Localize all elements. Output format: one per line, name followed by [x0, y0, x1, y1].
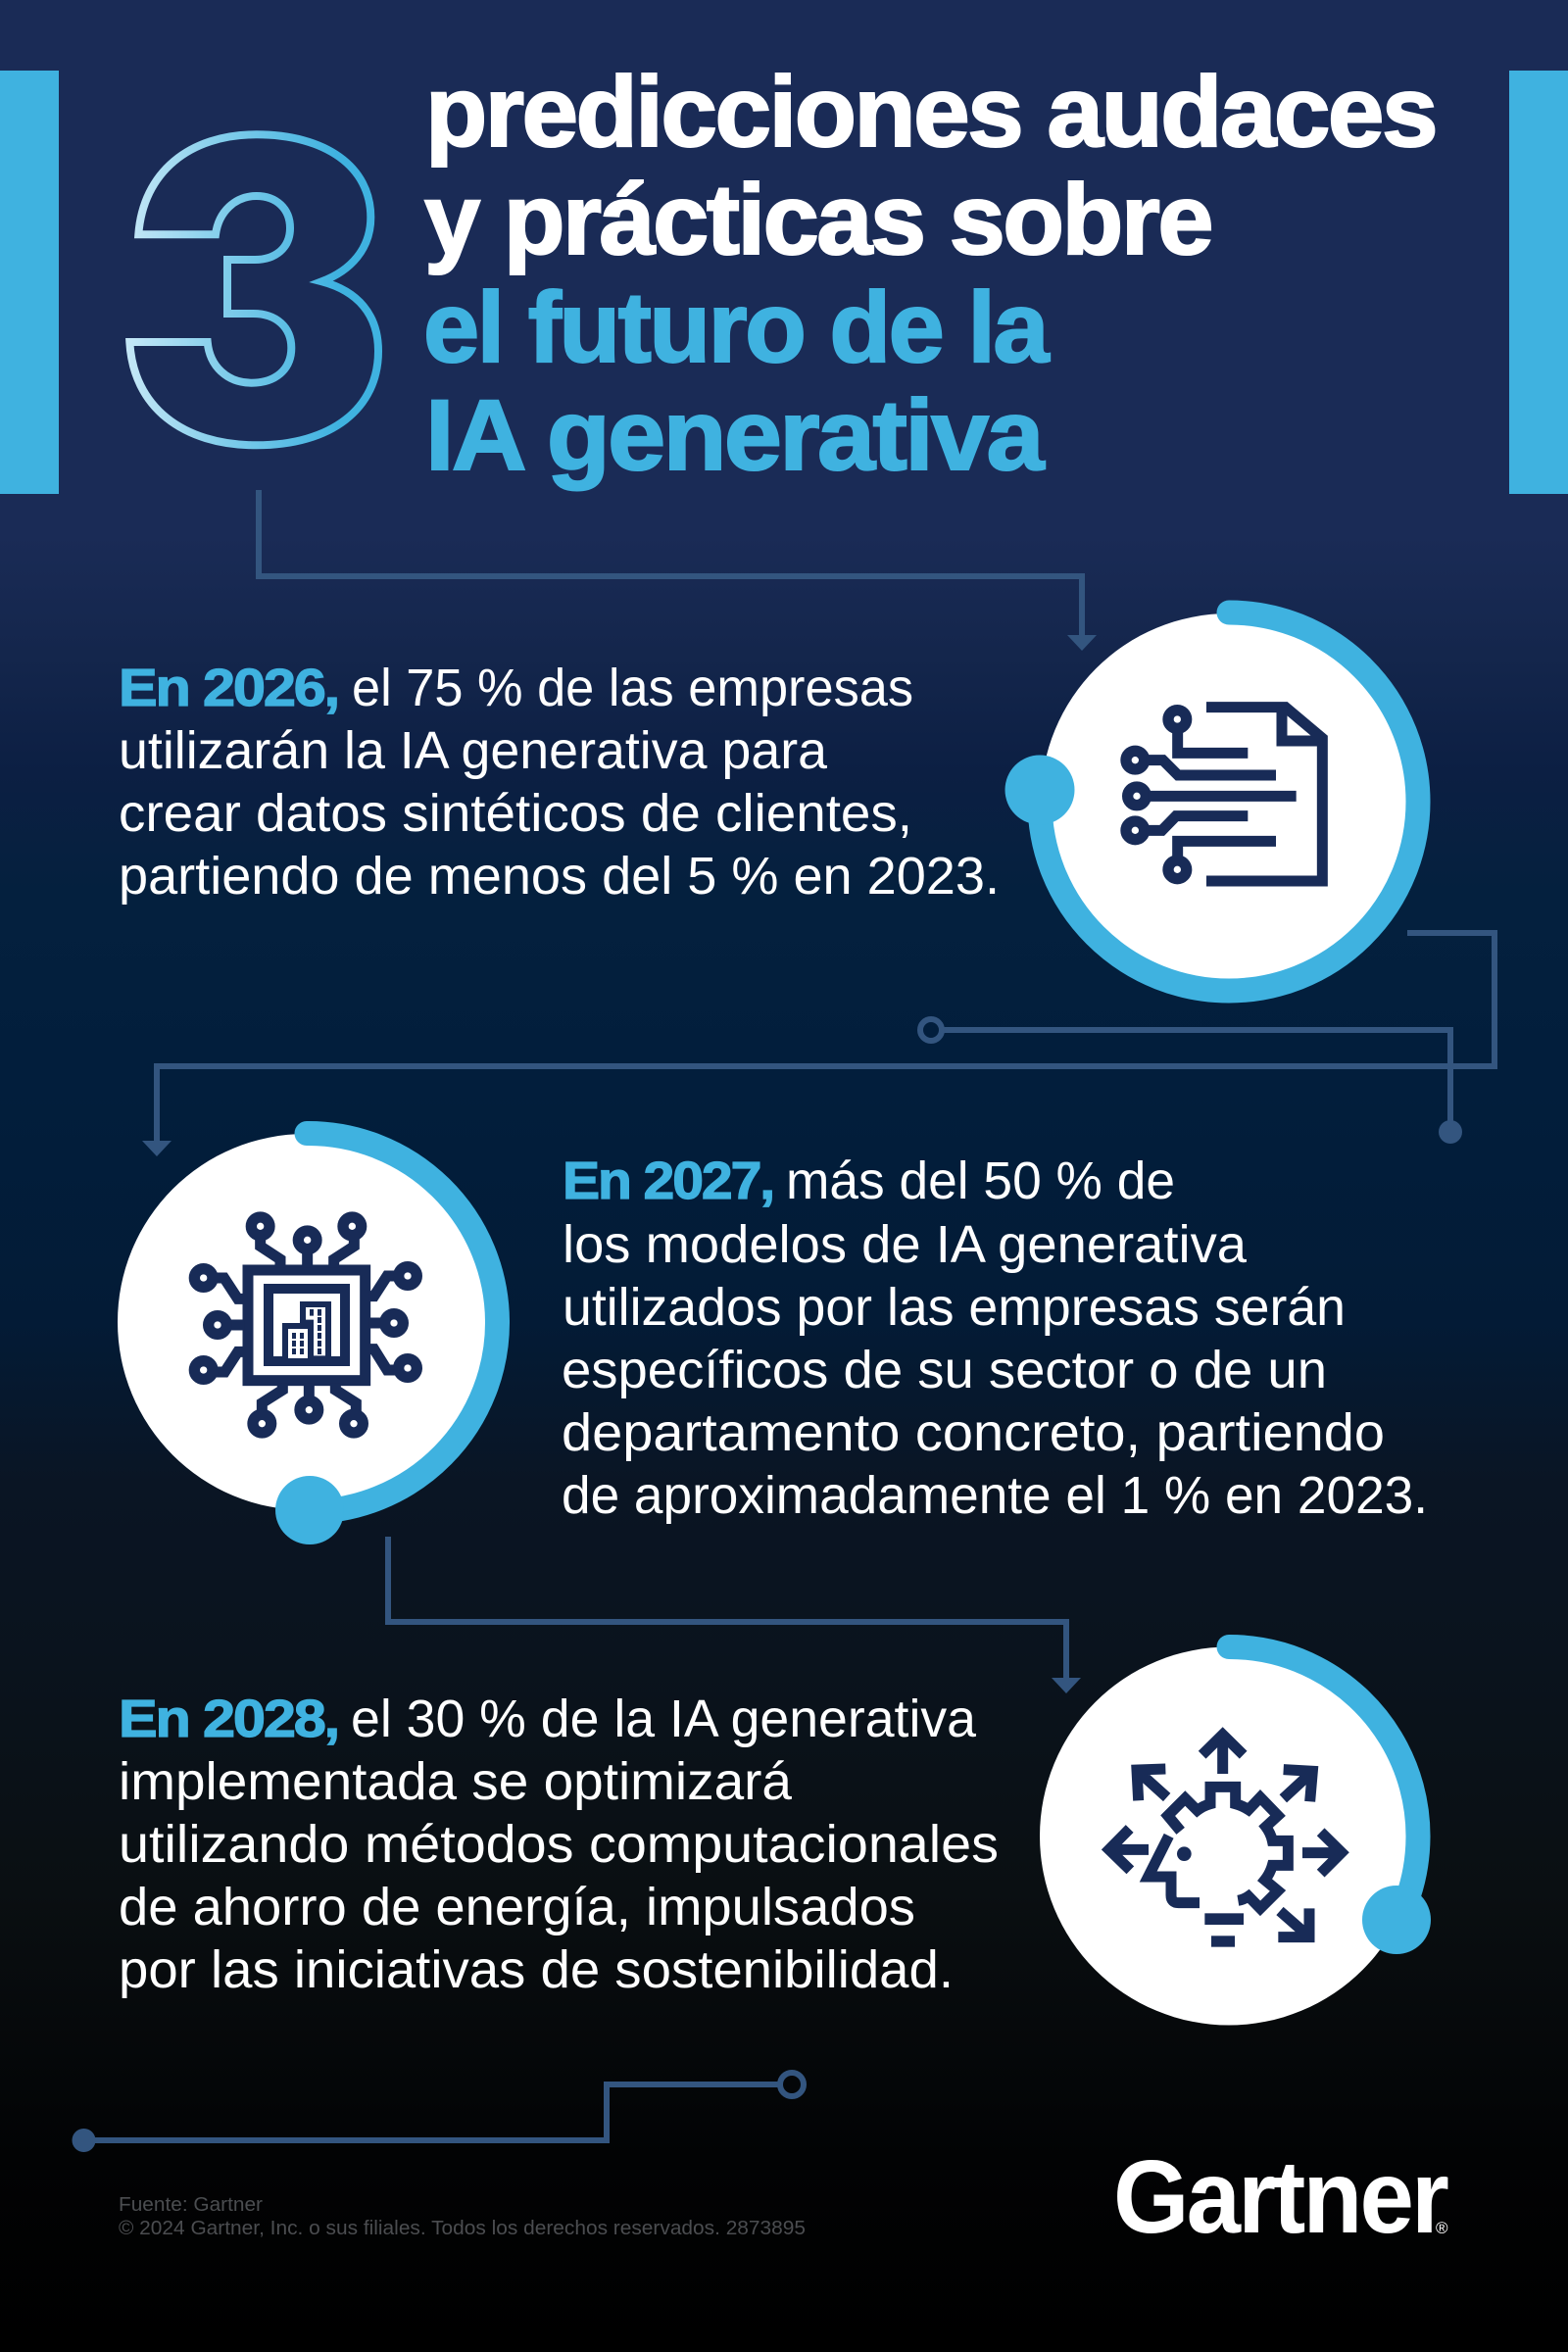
decorative circuit with nodes: [920, 1019, 1462, 1144]
text block: 2028 prediction: por las iniciativas de sostenibilidad.: [119, 1940, 954, 1999]
source and copyright: Fuente: Gartner: [119, 2194, 263, 2216]
text block: 2027 prediction: los modelos de IA generativa: [563, 1215, 1248, 1274]
title: IA generativa: [425, 379, 1046, 491]
text block: 2026 prediction: el 75 % de las empresas: [352, 659, 913, 717]
decorative bottom circuit line: [73, 2073, 804, 2152]
text block: 2028 prediction: de ahorro de energía, impulsados: [119, 1878, 915, 1936]
icon circle: synthetic data document: [1005, 612, 1418, 991]
icon: processor chip with buildings: [194, 1217, 416, 1433]
title: y prácticas sobre: [424, 164, 1211, 275]
Gartner logo: ®: [1436, 2219, 1448, 2237]
right accent bar: [1509, 71, 1568, 494]
text block: 2028 prediction: utilizando métodos computacionales: [119, 1815, 999, 1874]
text block: 2027 prediction: de aproximadamente el 1 % en 2023.: [562, 1466, 1428, 1525]
text block: 2028 prediction: implementada se optimizará: [119, 1752, 793, 1811]
text block: 2027 prediction: En 2027,: [563, 1152, 773, 1210]
text block: 2028 prediction: En 2028,: [119, 1690, 338, 1748]
text block: 2026 prediction: partiendo de menos del 5 % en 2023.: [119, 847, 1000, 906]
source and copyright: [119, 2194, 806, 2239]
text block: 2026 prediction: En 2026,: [119, 659, 338, 717]
arrow: title to first prediction: [259, 490, 1097, 651]
text block: 2026 prediction: [119, 659, 1000, 906]
icon circle: sustainable idea gear: [1040, 1646, 1431, 2025]
title: [423, 56, 1436, 491]
text block: 2026 prediction: utilizarán la IA generativa para: [119, 721, 828, 780]
connector: first prediction to second prediction: [142, 933, 1494, 1156]
icon circle: chip with buildings: [118, 1133, 498, 1544]
text block: 2027 prediction: [562, 1152, 1428, 1525]
icon: gear light bulb with arrows: [1109, 1735, 1342, 1947]
large outlined number 3: [129, 134, 378, 445]
text block: 2028 prediction: [119, 1690, 999, 1999]
source and copyright: © 2024 Gartner, Inc. o sus filiales. Todos los derechos reservados. 2873895: [119, 2218, 806, 2239]
title: el futuro de la: [423, 271, 1051, 383]
Gartner logo: Gartner: [1113, 2139, 1448, 2255]
text block: 2027 prediction: utilizados por las empresas serán: [563, 1278, 1346, 1337]
text block: 2027 prediction: departamento concreto, partiendo: [562, 1403, 1385, 1462]
text block: 2028 prediction: el 30 % de la IA generativa: [351, 1690, 977, 1748]
connector: second prediction to third prediction: [388, 1537, 1081, 1693]
left accent bar: [0, 71, 59, 494]
text block: 2027 prediction: más del 50 % de: [786, 1152, 1175, 1210]
text block: 2026 prediction: crear datos sintéticos de clientes,: [119, 784, 912, 843]
text block: 2027 prediction: específicos de su sector o de un: [562, 1341, 1327, 1399]
icon: document with circuit lines: [1126, 708, 1322, 881]
title: predicciones audaces: [425, 56, 1436, 168]
